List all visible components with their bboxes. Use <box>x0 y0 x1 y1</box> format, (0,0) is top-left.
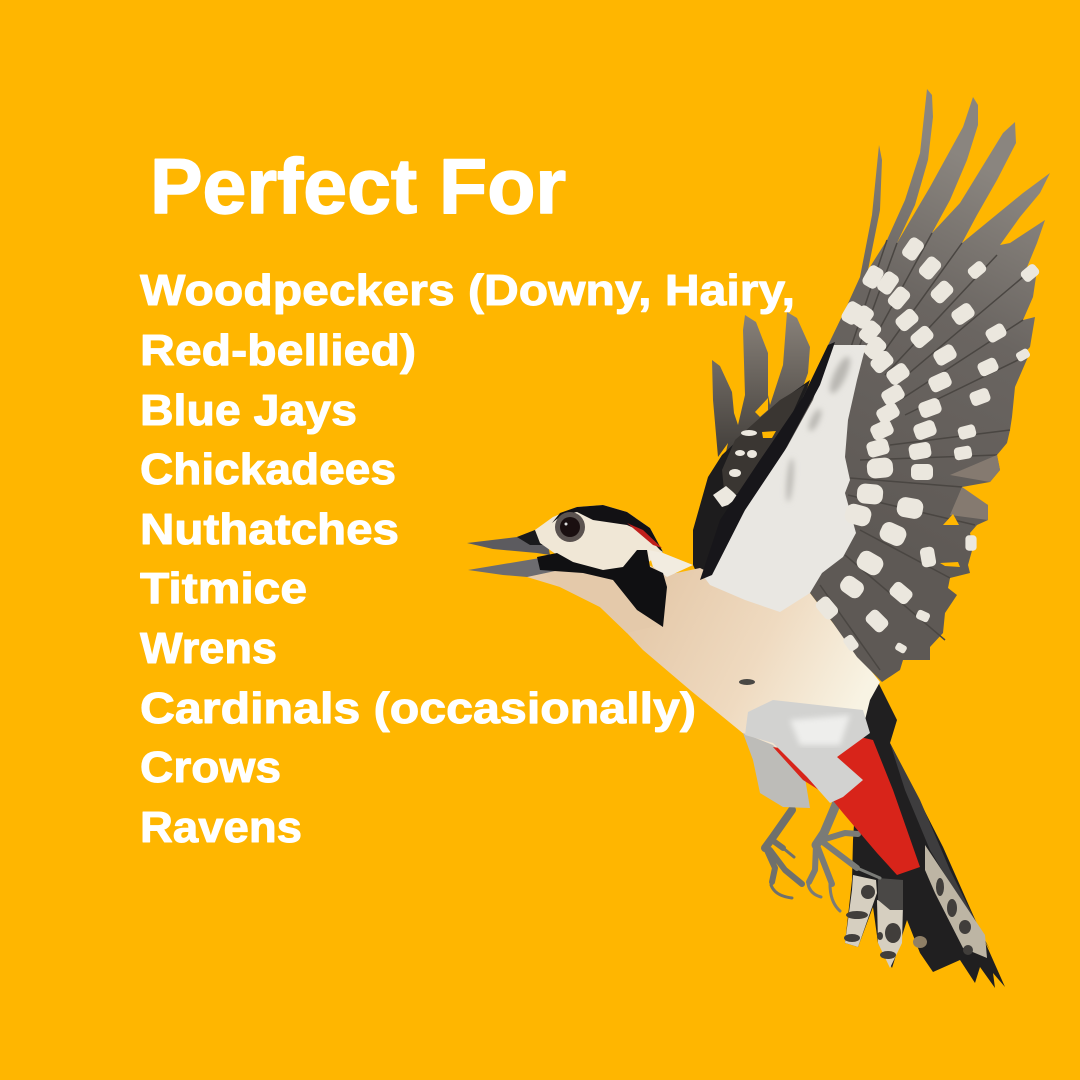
mottled shading on inner wing <box>785 354 854 502</box>
right leg and claws <box>808 800 880 911</box>
list item: chickadees: Chickadees <box>140 445 396 494</box>
white inner wing <box>704 345 866 612</box>
body <box>527 560 920 875</box>
face <box>535 505 663 572</box>
upper beak <box>467 530 550 555</box>
dark belly fleck <box>739 679 755 685</box>
black wing edge <box>700 342 835 580</box>
grey belly <box>745 700 870 803</box>
wing spots <box>814 235 1041 654</box>
middle tail feather <box>877 900 903 968</box>
list item: titmice: Titmice <box>140 564 307 613</box>
tail bars <box>844 878 973 959</box>
pale feather edges <box>950 455 1000 520</box>
far wing gaps <box>755 398 776 438</box>
tail tan spot <box>913 936 927 948</box>
list item: crows: Crows <box>140 743 281 792</box>
near wing <box>700 89 1050 682</box>
bird list <box>140 266 795 852</box>
lower beak <box>468 558 560 577</box>
list item: ravens: Ravens <box>140 803 302 852</box>
list item: blue jays: Blue Jays <box>140 386 357 435</box>
illustration: woodpecker in flight <box>467 89 1050 988</box>
throat patch <box>540 570 660 633</box>
black neck stripe <box>537 550 667 627</box>
nape patch <box>648 550 693 577</box>
grey thigh <box>743 733 810 808</box>
far wing <box>693 312 810 580</box>
left leg and claws <box>765 810 802 898</box>
title: Perfect For <box>150 142 566 230</box>
right tail feather band <box>925 845 987 958</box>
list item: red-bellied: Red-bellied) <box>140 326 416 375</box>
tail <box>844 680 1005 988</box>
far wing spots <box>713 430 757 507</box>
chest and belly <box>527 560 880 748</box>
wing gaps <box>940 514 960 567</box>
left tail feather <box>845 875 877 947</box>
far wing feathers <box>712 312 810 470</box>
red nape <box>627 523 662 548</box>
far wing dark coverts <box>693 380 810 580</box>
list item: nuthatches: Nuthatches <box>140 505 399 554</box>
crown <box>552 505 663 552</box>
list item: cardinals: Cardinals (occasionally) <box>140 684 696 733</box>
red undertail <box>773 737 920 875</box>
list item: woodpeckers: Woodpeckers (Downy, Hairy, <box>140 266 795 315</box>
head <box>467 505 693 633</box>
tail dark grey flank <box>890 743 1000 970</box>
list item: wrens: Wrens <box>140 624 277 673</box>
eye <box>555 512 585 542</box>
wing feathers <box>704 89 1050 682</box>
feather dividers <box>820 233 1023 670</box>
